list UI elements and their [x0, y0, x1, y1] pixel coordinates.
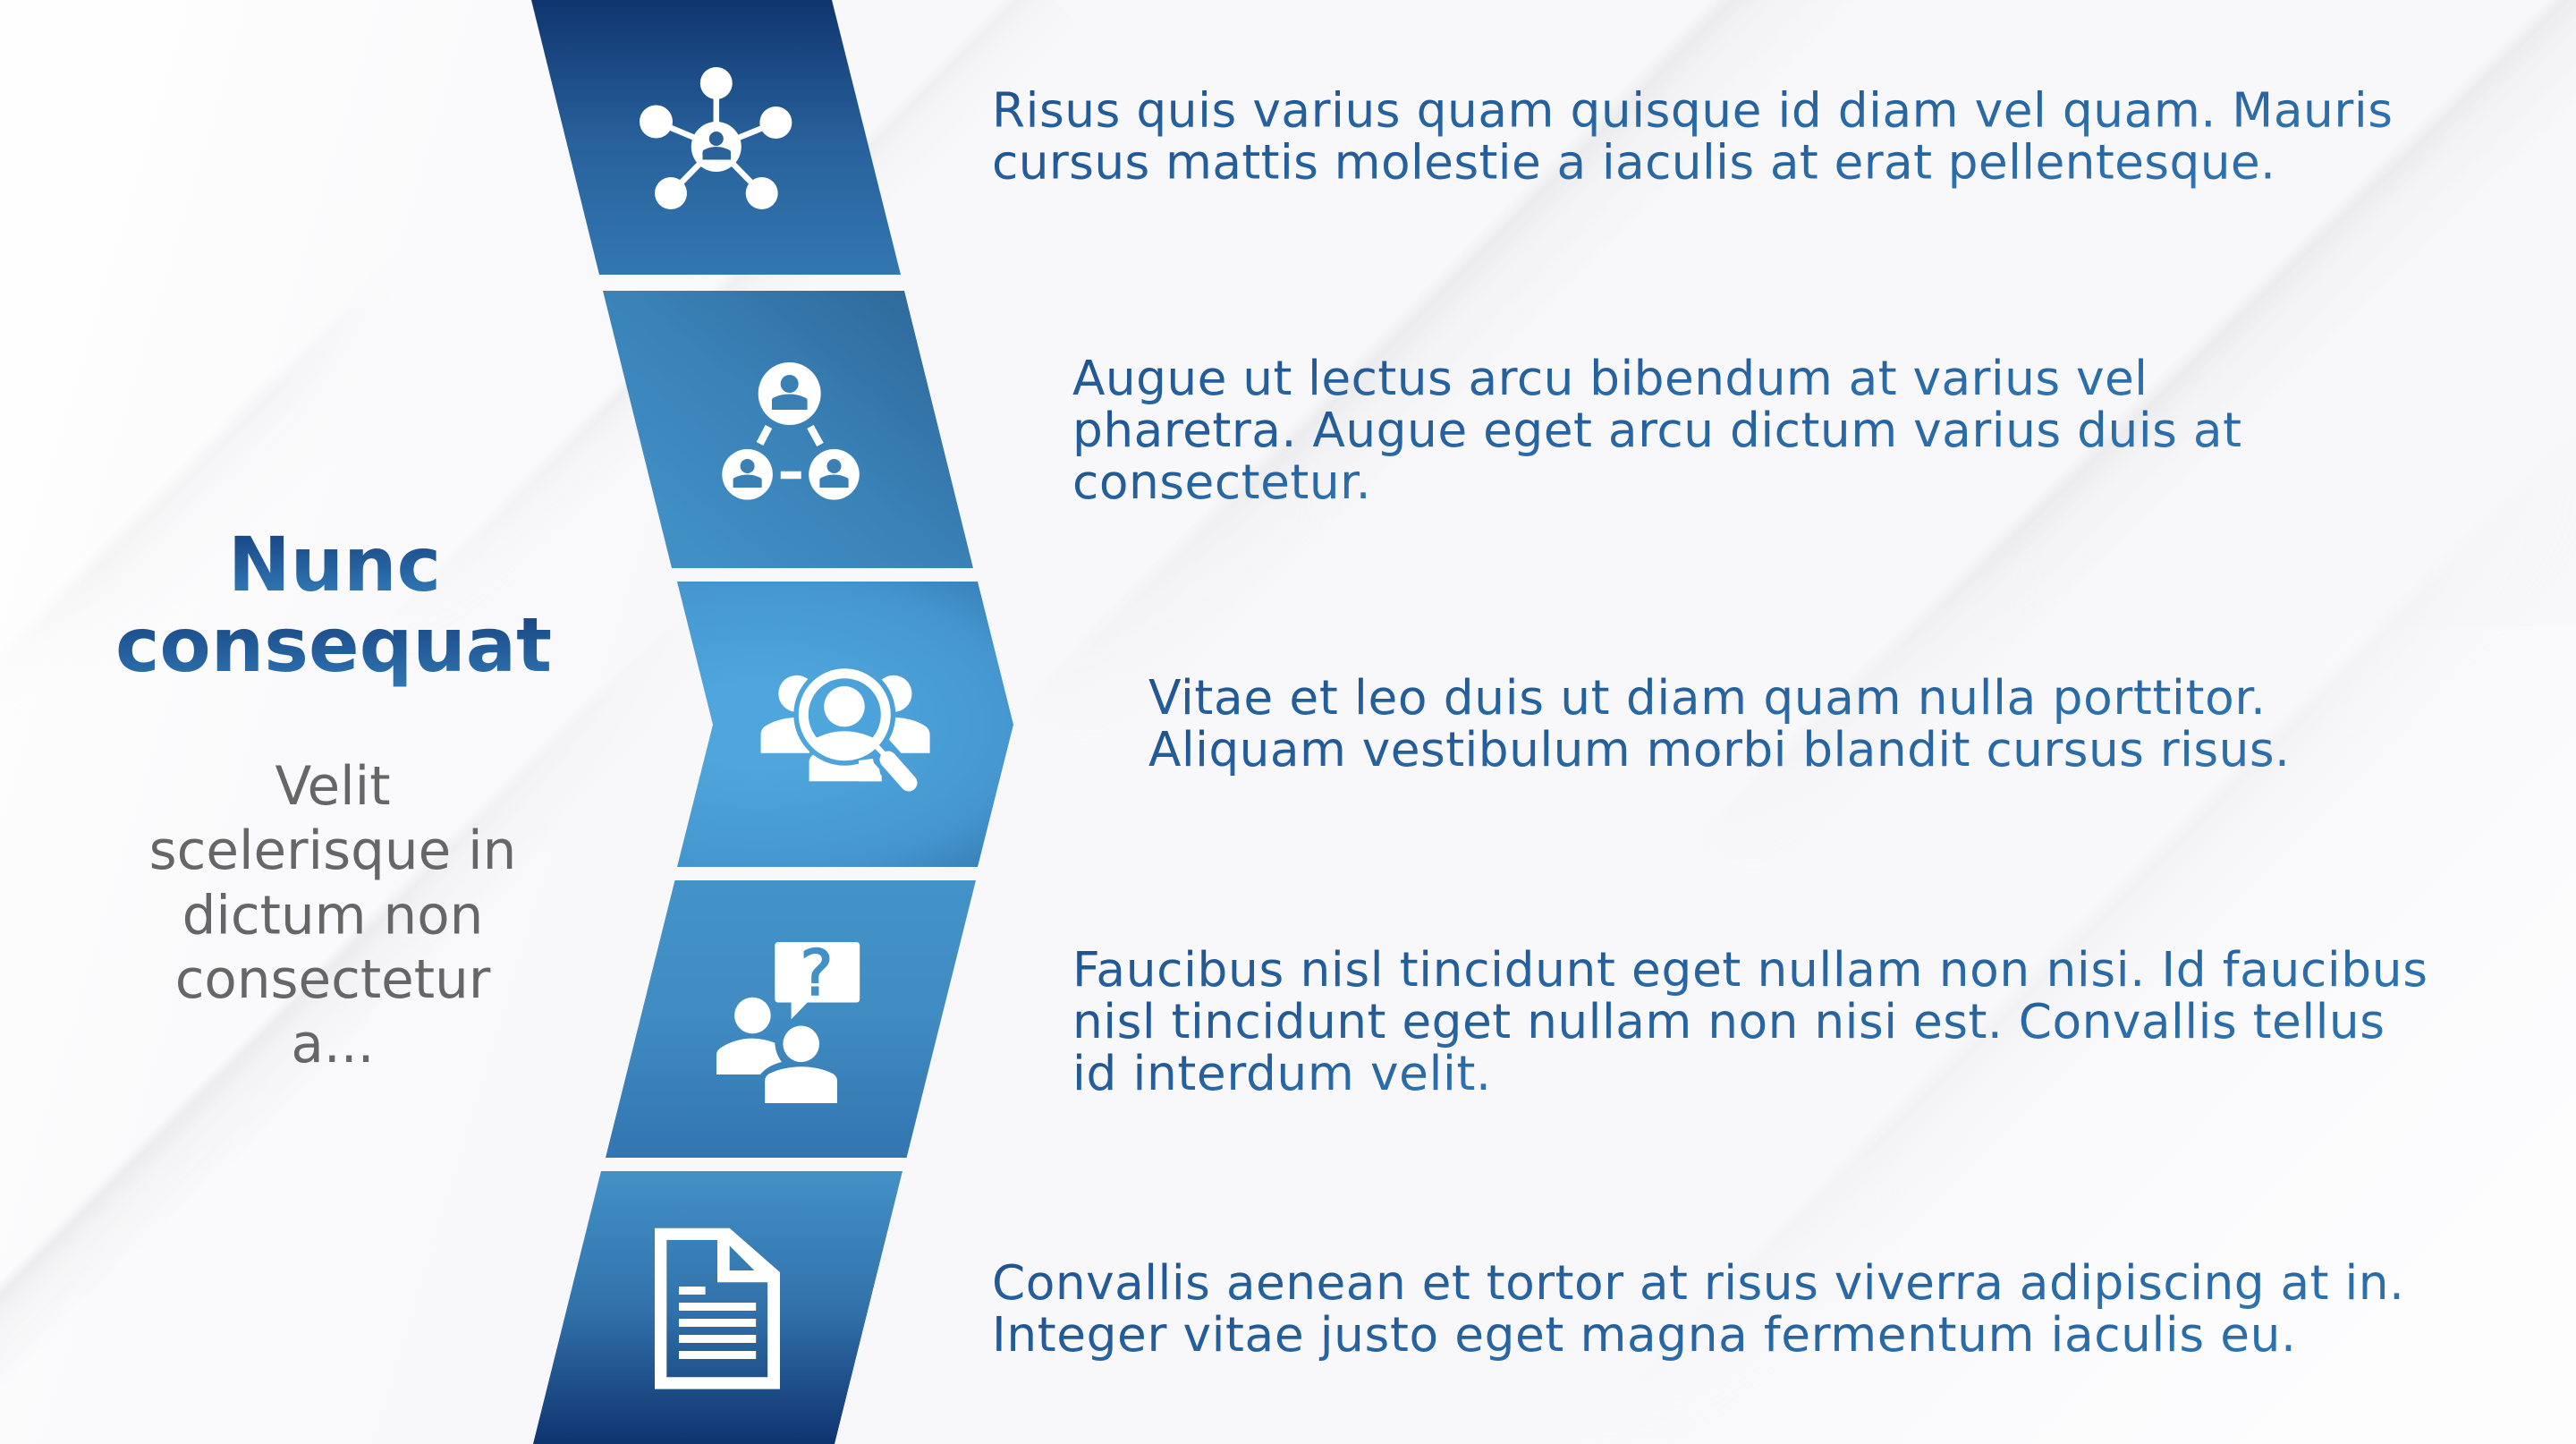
text block 4: nisl tincidunt eget nullam non nisi est. Convallis tellus — [1072, 993, 2385, 1049]
left description text: dictum non — [182, 886, 483, 947]
icon: people with question bubble: ? — [800, 937, 834, 1010]
icon: magnifier over people — [761, 674, 930, 783]
panel: chevron segment 5 — [533, 1171, 902, 1444]
icon: document — [655, 1228, 780, 1389]
text block 5: Integer vitae justo eget magna fermentum iaculis eu. — [992, 1306, 2296, 1363]
text block 2 — [1072, 350, 2241, 510]
icon: three connected people — [722, 362, 860, 500]
left description text: scelerisque in — [149, 820, 516, 882]
panel: chevron segment 3 (arrow tip) — [677, 582, 1013, 867]
text block 4 — [1072, 941, 2428, 1101]
text block 5 — [992, 1254, 2404, 1363]
panel: chevron segment 2 — [603, 291, 973, 568]
left description text: consectetur — [175, 949, 491, 1011]
text block 4: id interdum velit. — [1072, 1045, 1491, 1101]
text block 1: Risus quis varius quam quisque id diam vel quam. Mauris — [992, 82, 2393, 138]
left description text: Velit — [275, 756, 391, 818]
text block 2: pharetra. Augue eget arcu dictum varius duis at — [1072, 402, 2241, 458]
icon: network hub with person — [640, 67, 792, 209]
text block 5: Convallis aenean et tortor at risus viverra adipiscing at in. — [992, 1254, 2404, 1311]
panel: chevron segment 1 — [531, 0, 901, 275]
text block 3 — [1148, 669, 2290, 777]
text block 1 — [992, 82, 2393, 190]
text block 2: Augue ut lectus arcu bibendum at varius vel — [1072, 350, 2148, 406]
text block 2: consectetur. — [1072, 454, 1371, 510]
heading: consequat — [115, 601, 552, 689]
left description text — [149, 756, 516, 1075]
text block 3: Aliquam vestibulum morbi blandit cursus risus. — [1148, 721, 2290, 777]
text block 3: Vitae et leo duis ut diam quam nulla porttitor. — [1148, 669, 2266, 726]
heading — [115, 521, 552, 689]
icon: people with question bubble — [716, 937, 860, 1103]
left description text: a... — [291, 1014, 375, 1075]
panel: chevron segment 4 — [606, 880, 976, 1158]
text block 1: cursus mattis molestie a iaculis at erat pellentesque. — [992, 134, 2275, 190]
text block 4: Faucibus nisl tincidunt eget nullam non nisi. Id faucibus — [1072, 941, 2428, 998]
heading: Nunc — [228, 521, 441, 608]
